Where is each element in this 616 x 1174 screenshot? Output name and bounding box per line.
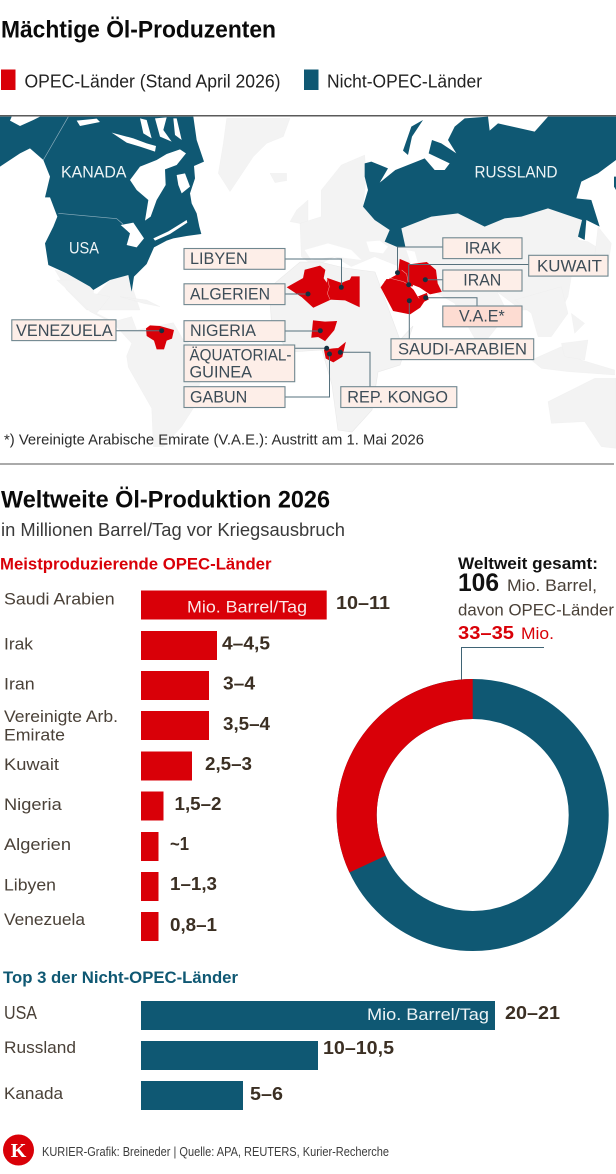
label: LIBYEN <box>184 248 285 269</box>
Nigeria <box>312 321 337 341</box>
callout: Weltweit gesamt: Mio. Barrel, <box>507 576 597 595</box>
footer logo: K <box>11 1140 27 1162</box>
label: IRAN <box>443 270 522 291</box>
country labels: Iran <box>4 674 35 693</box>
non-OPEC: Kanada und USA <box>0 117 204 292</box>
label: IRAN: IRAN <box>463 271 501 290</box>
donut: OPEC share <box>337 679 473 872</box>
callout: Weltweit gesamt: 33–35 <box>458 623 514 643</box>
country labels: Emirate <box>4 726 65 745</box>
callout leader line <box>462 648 544 680</box>
country labels: Saudi Arabien <box>4 589 115 608</box>
bar chart: Nicht-OPEC-Länder <box>3 968 560 1110</box>
country labels: Nigeria <box>4 795 62 814</box>
Grenzlinien <box>43 117 124 225</box>
subheading: in Millionen Barrel/Tag vor Kriegsausbruch <box>1 520 345 540</box>
Hudson Bay and Arctic channels <box>77 117 190 221</box>
country labels: Vereinigte Arb. <box>4 707 118 726</box>
V.A.E. <box>418 293 428 302</box>
label: NIGERIA: NIGERIA <box>190 321 257 340</box>
label: IRAK <box>443 238 522 259</box>
label: REP. KONGO: REP. KONGO <box>347 388 448 407</box>
legend swatch: Nicht-OPEC <box>304 70 318 90</box>
values: 5–6 <box>250 1084 283 1104</box>
values: 10–11 <box>336 593 390 613</box>
heading: Weltweite Öl-Produktion 2026: Weltweite Öl-Produktion 2026 <box>1 486 330 514</box>
donut: Nicht-OPEC <box>357 699 589 931</box>
country labels: Venezuela <box>4 910 86 929</box>
values: 3–4 <box>223 673 255 693</box>
legend label: Nicht-OPEC: Nicht-OPEC-Länder <box>327 72 482 92</box>
country labels: USA <box>4 1003 37 1023</box>
callout: Weltweit gesamt: Mio. <box>521 624 554 643</box>
map background land <box>55 118 616 448</box>
label: SAUDI-ARABIEN: SAUDI-ARABIEN <box>398 340 527 359</box>
values <box>170 593 390 935</box>
Äquatorialguinea, Gabun, Rep. Kongo <box>324 343 345 362</box>
country labels: Russland <box>4 1038 76 1057</box>
chart heading: Top 3 der Nicht-OPEC-Länder <box>3 968 238 987</box>
values: 0,8–1 <box>170 915 217 935</box>
legend <box>1 70 482 92</box>
label: ALGERIEN: ALGERIEN <box>190 284 270 303</box>
legend label: OPEC: OPEC-Länder (Stand April 2026) <box>24 72 280 92</box>
label: ÄQUATORIAL-GUINEA: GUINEA <box>190 362 253 381</box>
label: ÄQUATORIAL-GUINEA <box>184 345 295 382</box>
country labels <box>4 1003 76 1103</box>
map label: USA: USA <box>69 238 100 258</box>
callout: Weltweit gesamt <box>458 554 614 643</box>
callout: Weltweit gesamt: 106 <box>458 569 499 597</box>
callout: Weltweit gesamt: davon OPEC-Länder <box>458 601 614 620</box>
label: GABUN: GABUN <box>190 388 247 407</box>
Algerien <box>287 266 331 307</box>
country labels: Algerien <box>4 835 71 854</box>
bar chart: OPEC-Länder <box>0 554 390 941</box>
legend swatch: OPEC <box>1 70 16 90</box>
Saudi-Arabien <box>381 279 425 314</box>
country labels: Libyen <box>4 876 56 895</box>
OPEC countries <box>287 259 441 362</box>
Libyen <box>327 277 359 307</box>
OPEC: Venezuela <box>146 325 174 349</box>
values: 1,5–2 <box>174 794 222 814</box>
bars <box>141 590 327 941</box>
values <box>250 1003 560 1104</box>
values: 4–4,5 <box>222 633 270 653</box>
country labels <box>4 589 118 929</box>
title: Mächtige Öl-Produzenten: Mächtige Öl-Produzenten <box>1 16 276 44</box>
Irak <box>385 259 413 287</box>
non-OPEC: Russland <box>363 117 616 247</box>
Great Lakes <box>121 220 187 247</box>
values: ~1 <box>170 834 189 854</box>
chart heading: Meistproduzierende OPEC-Länder <box>0 554 272 573</box>
label: IRAK: IRAK <box>465 238 502 257</box>
label: LIBYEN: LIBYEN <box>190 249 248 268</box>
values: 2,5–3 <box>205 754 252 774</box>
Iran <box>407 262 441 294</box>
country labels: Irak <box>4 634 34 653</box>
label: V.A.E* <box>443 306 522 327</box>
map label: KANADA: KANADA <box>61 162 127 182</box>
values: 3,5–4 <box>223 714 270 734</box>
label: VENEZUELA: VENEZUELA <box>16 321 113 340</box>
location dots <box>159 270 428 356</box>
world map <box>0 117 616 448</box>
borders between OPEC countries <box>327 270 409 299</box>
footer logo <box>3 1134 34 1166</box>
footnote: *) Vereinigte Arabische Emirate (V.A.E.): Austritt am 1. Mai 2026 <box>4 432 424 448</box>
map label: RUSSLAND: RUSSLAND <box>474 162 558 182</box>
label: NIGERIA <box>184 321 285 342</box>
values: 20–21 <box>505 1003 560 1023</box>
country labels: Kanada <box>4 1084 64 1103</box>
leader lines <box>116 247 529 397</box>
values: 1–1,3 <box>170 874 217 894</box>
country labels: Kuwait <box>4 755 59 774</box>
donut chart <box>337 679 589 931</box>
unit label in bar: Mio. Barrel/Tag <box>187 598 307 617</box>
unit label in bar: Mio. Barrel/Tag <box>367 1005 489 1024</box>
values: 10–10,5 <box>323 1038 394 1058</box>
label: ÄQUATORIAL-GUINEA: ÄQUATORIAL- <box>190 346 292 365</box>
seas cut-outs <box>305 241 418 265</box>
callout: Weltweit gesamt: Weltweit gesamt: <box>458 554 598 573</box>
label: V.A.E*: V.A.E* <box>459 307 505 326</box>
bars <box>141 1001 495 1110</box>
label: GABUN <box>184 387 285 408</box>
label: KUWAIT: KUWAIT <box>537 256 602 276</box>
footer source: KURIER-Grafik: Breineder | Quelle: APA, REUTERS, Kurier-Recherche <box>42 1145 389 1159</box>
